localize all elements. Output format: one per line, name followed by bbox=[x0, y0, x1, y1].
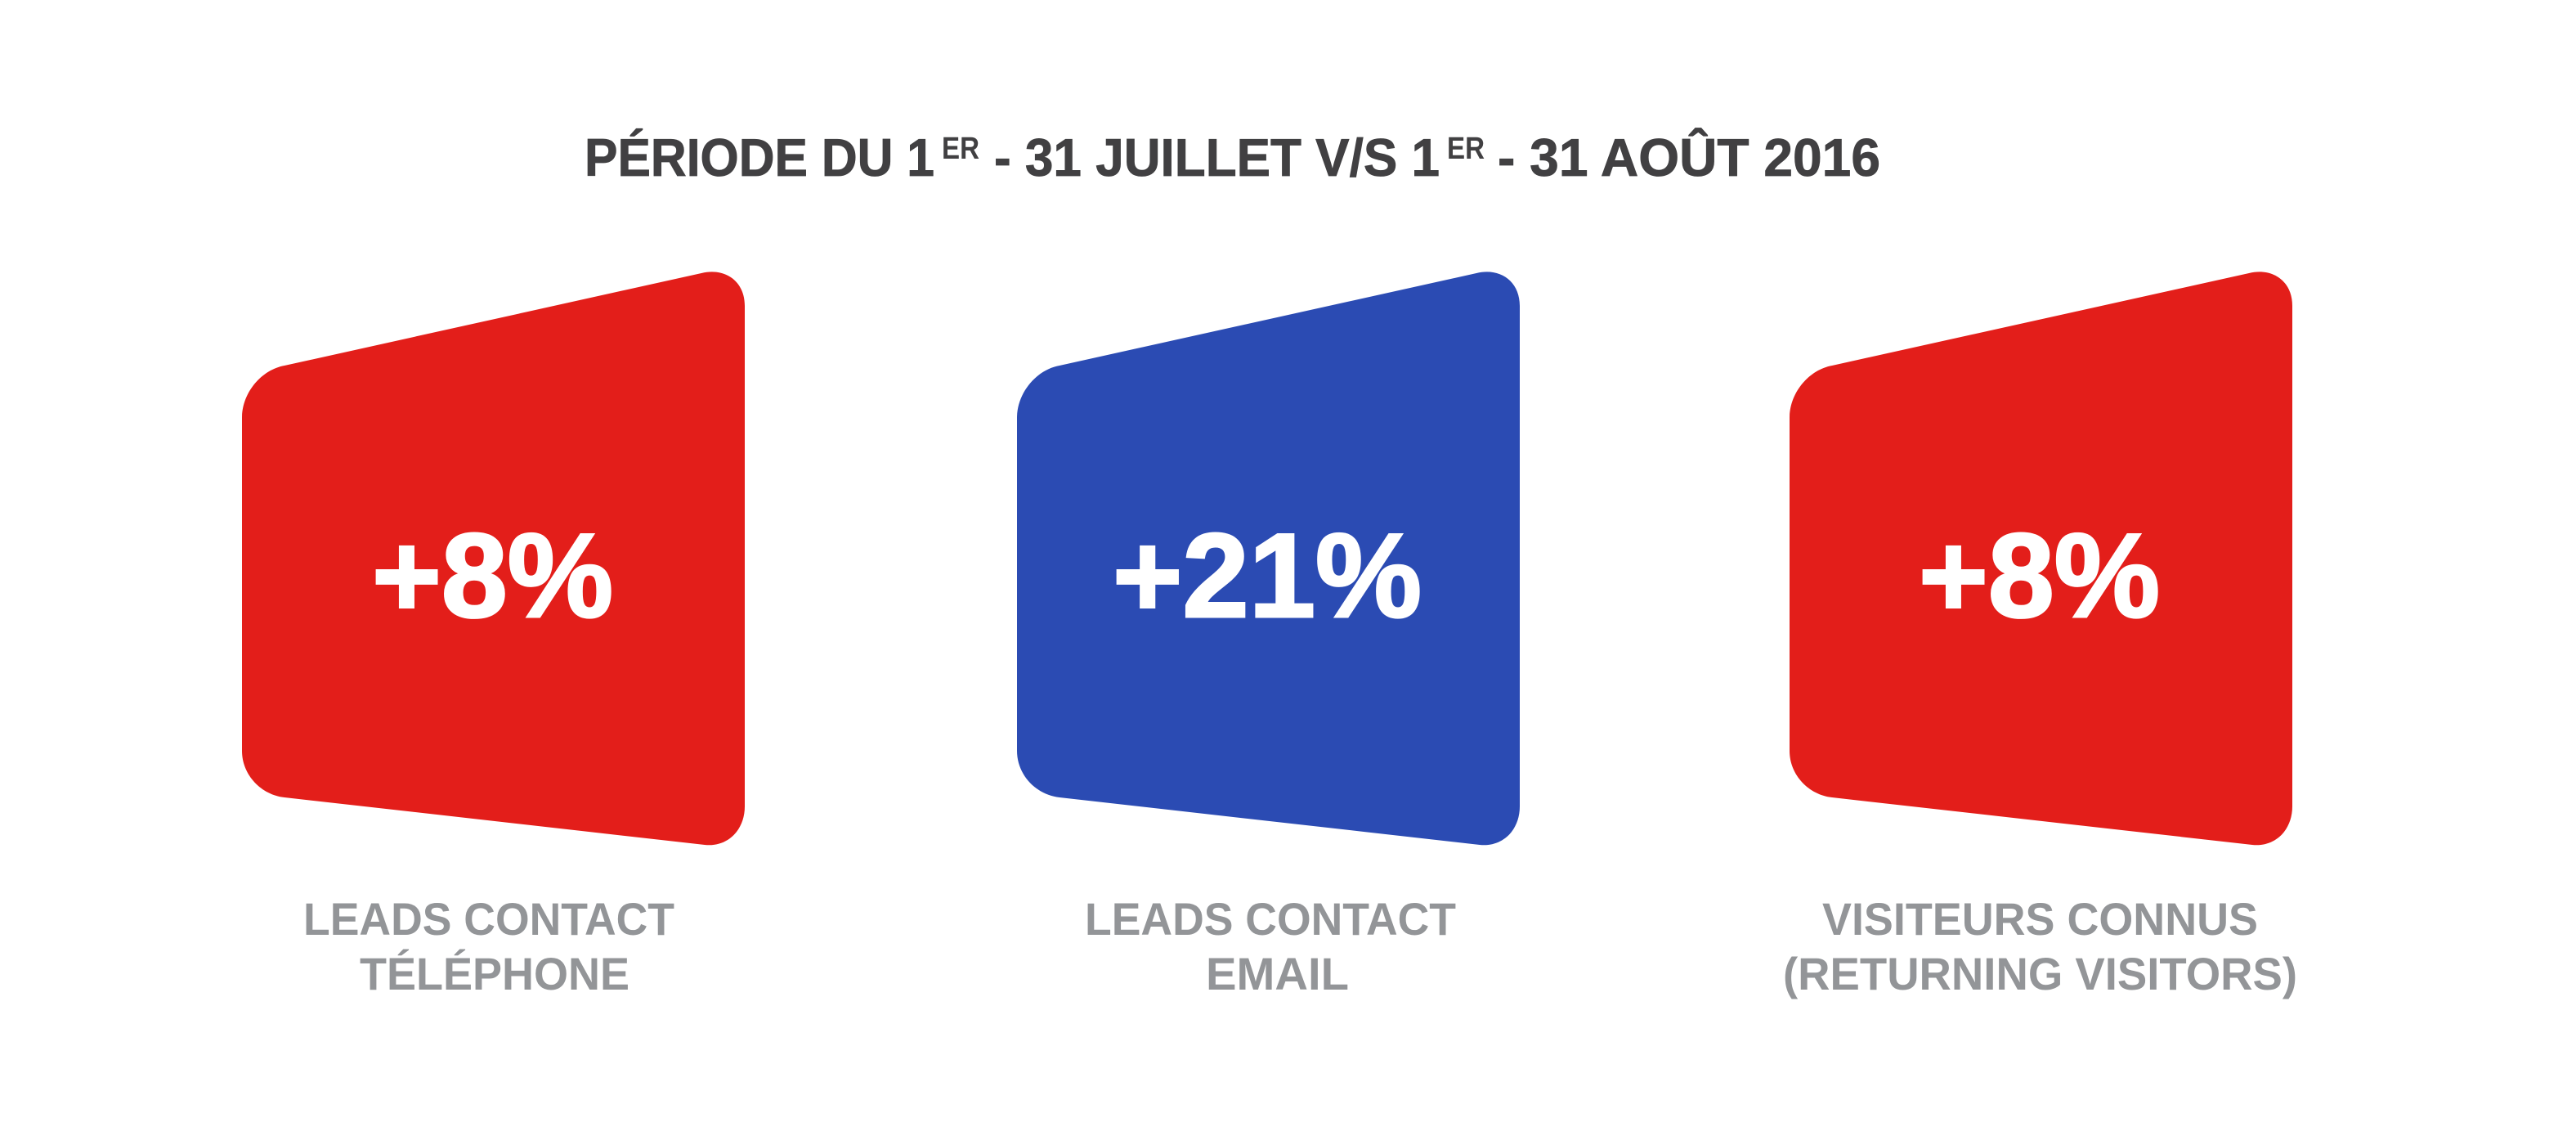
value: +8%: +8% bbox=[372, 509, 613, 642]
title: - 31 JUILLET V/S 1 bbox=[994, 128, 1440, 187]
shape: red card bbox=[1790, 272, 2292, 845]
label: leads contact téléphone: LEADS CONTACT bbox=[303, 893, 674, 945]
label: leads contact email: EMAIL bbox=[1206, 948, 1349, 999]
label: visiteurs connus (returning visitors): VISITEURS CONNUS bbox=[1822, 893, 2258, 945]
label: visiteurs connus (returning visitors): (RETURNING VISITORS) bbox=[1783, 948, 2297, 999]
panel: visiteurs connus bbox=[1783, 272, 2297, 999]
value: +21%: +21% bbox=[1113, 509, 1422, 642]
panel: leads contact téléphone bbox=[242, 272, 745, 999]
title: ER bbox=[1447, 132, 1485, 166]
title: ER bbox=[942, 132, 979, 166]
shape: red card bbox=[242, 272, 745, 845]
panel: leads contact email bbox=[1017, 272, 1520, 999]
title: PÉRIODE DU 1 bbox=[585, 128, 934, 187]
shape: blue card bbox=[1017, 272, 1520, 845]
title: - 31 AOÛT 2016 bbox=[1498, 128, 1880, 187]
label: leads contact téléphone: TÉLÉPHONE bbox=[360, 948, 629, 999]
value: +8%: +8% bbox=[1919, 509, 2160, 642]
label: leads contact email: LEADS CONTACT bbox=[1085, 893, 1456, 945]
